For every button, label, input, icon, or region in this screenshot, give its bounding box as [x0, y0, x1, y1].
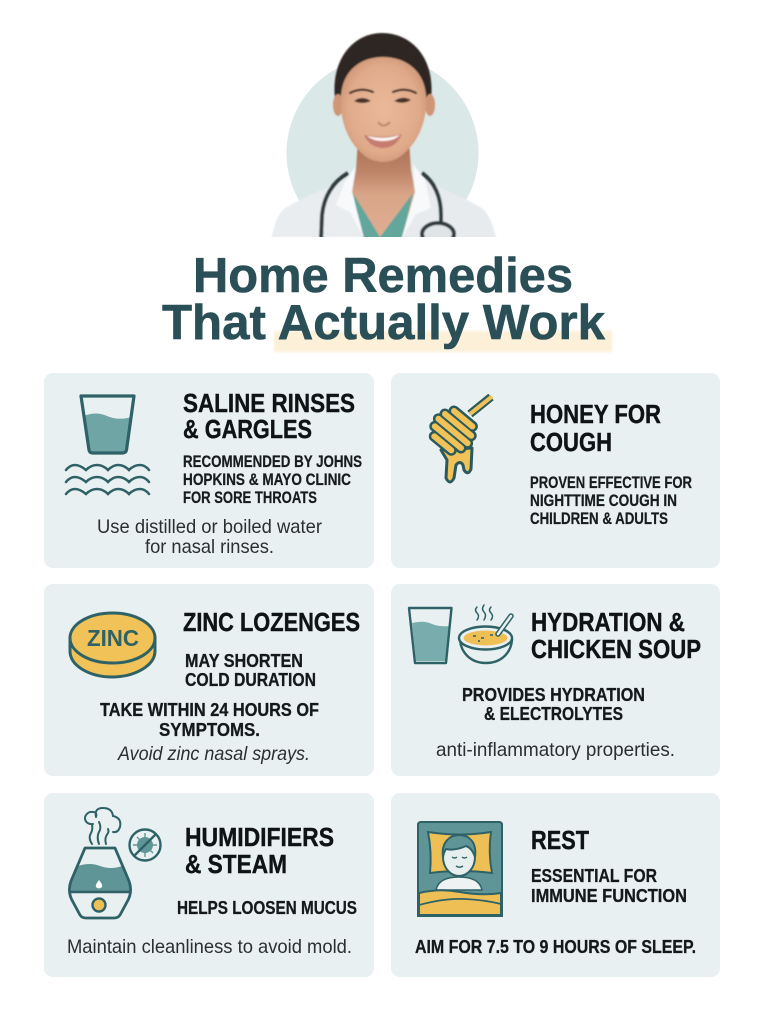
- panel: honey: [391, 373, 720, 568]
- heading: COUGH: [530, 429, 612, 457]
- subheading: [531, 865, 687, 906]
- note: Use distilled or boiled water: [97, 516, 322, 538]
- instruction: TAKE WITHIN 24 HOURS OF: [100, 699, 319, 720]
- card background: [391, 584, 720, 776]
- icon: humidifier: [69, 808, 131, 918]
- subheading: [530, 474, 692, 528]
- portrait: doctor: [271, 33, 497, 249]
- heading: SALINE RINSES: [183, 390, 355, 418]
- doctor figure: [271, 33, 497, 245]
- icon: soup bowl: [459, 605, 512, 663]
- card background: [391, 373, 720, 568]
- panel: humidifiers and steam: [44, 793, 374, 977]
- heading: CHICKEN SOUP: [531, 636, 701, 664]
- subheading: PROVIDES HYDRATION: [462, 684, 645, 705]
- card background: [44, 584, 374, 776]
- note: Maintain cleanliness to avoid mold.: [67, 936, 352, 958]
- subheading: & ELECTROLYTES: [484, 703, 623, 724]
- subheading: [183, 453, 362, 507]
- note: [97, 516, 322, 558]
- icon: no germs: [130, 830, 160, 860]
- instruction: AIM FOR 7.5 TO 9 HOURS OF SLEEP.: [415, 936, 696, 957]
- heading: & GARGLES: [183, 416, 312, 444]
- note: for nasal rinses.: [145, 536, 274, 558]
- heading: REST: [531, 827, 589, 855]
- card background: [44, 373, 374, 568]
- subheading: HELPS LOOSEN MUCUS: [177, 897, 357, 918]
- note: anti-inflammatory properties.: [436, 739, 675, 761]
- subheading: HOPKINS & MAYO CLINIC: [183, 471, 351, 489]
- subheading: [462, 684, 645, 724]
- heading: & STEAM: [185, 851, 287, 879]
- heading: HONEY FOR: [530, 401, 661, 429]
- icon: honey dipper: [434, 396, 492, 482]
- heading: HUMIDIFIERS: [185, 824, 334, 852]
- panel: rest: [391, 793, 720, 977]
- subheading: RECOMMENDED BY JOHNS: [183, 453, 362, 471]
- subheading: MAY SHORTEN: [185, 650, 303, 671]
- panel: zinc lozenges: [44, 584, 374, 776]
- heading: HYDRATION &: [531, 609, 685, 637]
- subheading: COLD DURATION: [185, 669, 316, 690]
- subheading: IMMUNE FUNCTION: [531, 885, 687, 906]
- heading: [530, 401, 661, 457]
- heading: [531, 609, 701, 664]
- icon: glass of water: [409, 608, 452, 663]
- subheading: PROVEN EFFECTIVE FOR: [530, 474, 692, 492]
- title line 2: That Actually Work: [162, 296, 606, 350]
- title highlight: [274, 331, 612, 352]
- subheading: [185, 650, 316, 690]
- card background: [391, 793, 720, 977]
- panel: hydration and chicken soup: [391, 584, 720, 776]
- title: [162, 249, 612, 352]
- title line 1: Home Remedies: [193, 249, 573, 303]
- icon: zinc lozenge: ZINC: [87, 625, 139, 651]
- instruction: [100, 699, 319, 740]
- panel: saline rinses: [44, 373, 374, 568]
- card background: [44, 793, 374, 977]
- subheading: FOR SORE THROATS: [183, 489, 317, 507]
- subheading: ESSENTIAL FOR: [531, 865, 657, 886]
- background circle: [286, 68, 478, 201]
- instruction: SYMPTOMS.: [159, 719, 260, 740]
- heading: [183, 390, 355, 444]
- note: Avoid zinc nasal sprays.: [117, 743, 310, 765]
- icon: zinc lozenge: [70, 613, 155, 677]
- heading: ZINC LOZENGES: [183, 609, 360, 637]
- subheading: NIGHTTIME COUGH IN: [530, 492, 677, 510]
- icon: person sleeping in bed: [418, 822, 502, 916]
- subheading: CHILDREN & ADULTS: [530, 510, 668, 528]
- icon: glass of salt water with waves: [66, 396, 149, 494]
- heading: [185, 824, 334, 879]
